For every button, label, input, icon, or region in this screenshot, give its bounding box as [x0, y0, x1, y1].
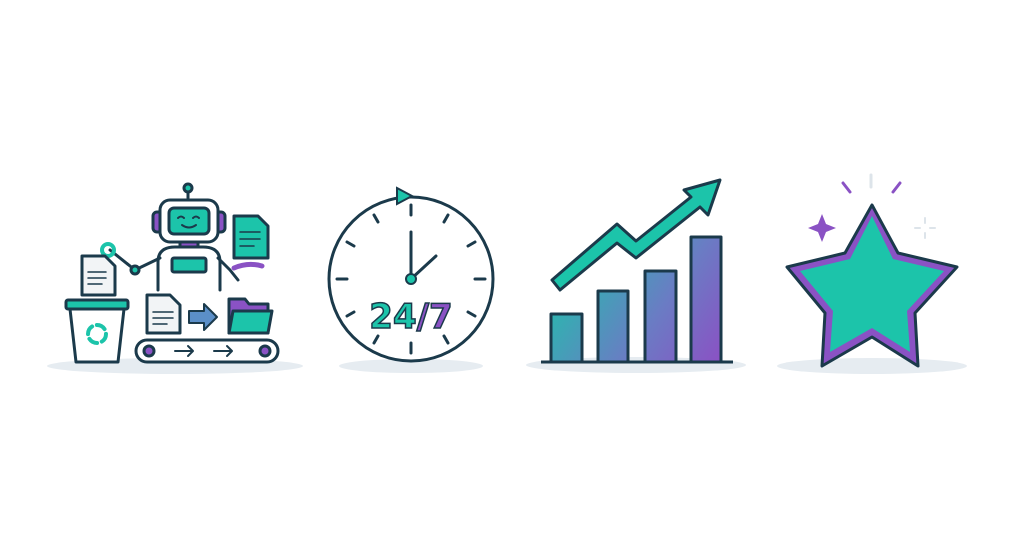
- panel: 24/7 clock: [329, 188, 493, 373]
- panel: star: [777, 175, 967, 374]
- text: 24/7: 24/7: [369, 297, 453, 337]
- panel: automation robot: [47, 184, 303, 374]
- panel: growth chart: [526, 180, 746, 373]
